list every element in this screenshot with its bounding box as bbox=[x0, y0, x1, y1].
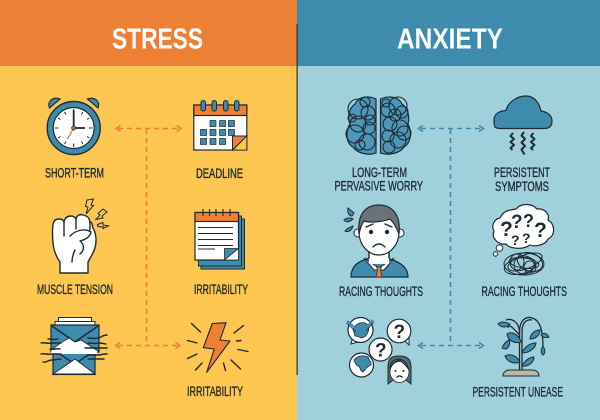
label: racing thoughts (boy): RACING THOUGHTS bbox=[339, 284, 423, 299]
label: muscle tension: MUSCLE TENSION bbox=[37, 282, 113, 297]
icon: thought cloud with question marks: ? bbox=[511, 232, 520, 248]
label: long-term pervasive worry: LONG-TERM bbox=[352, 165, 407, 180]
label: short-term: SHORT-TERM bbox=[45, 166, 104, 180]
icon: thought cloud with question marks: ? bbox=[534, 219, 547, 242]
icon: thought cloud with question marks: ? bbox=[511, 212, 523, 233]
header: stress bbox=[0, 0, 298, 66]
arrow: stress connector bbox=[116, 126, 181, 348]
icon: torn envelope bbox=[41, 318, 107, 374]
icon: thought cloud with question marks: ? bbox=[500, 218, 513, 241]
icon: notepad stack bbox=[195, 209, 244, 269]
bubble: question: ? bbox=[394, 322, 405, 343]
label: long-term pervasive worry: PERVASIVE WORRY bbox=[334, 178, 423, 194]
icon: thought cloud with question marks: ? bbox=[522, 230, 531, 246]
bubble: globe bbox=[350, 353, 374, 377]
label: irritability (bolt): IRRITABILITY bbox=[187, 384, 243, 399]
icon: tension bolts bbox=[86, 199, 108, 228]
icon: wilting plant bbox=[498, 318, 549, 376]
arrow: anxiety connector bbox=[418, 126, 484, 348]
icon: worried thought bubbles and girl bbox=[346, 318, 411, 384]
icon: rain cloud bbox=[494, 96, 552, 154]
label: deadline: DEADLINE bbox=[196, 166, 243, 181]
label: persistent symptoms bbox=[494, 165, 550, 194]
icon: lightning bolt bbox=[188, 323, 248, 372]
header: stress: STRESS bbox=[112, 24, 203, 56]
header: anxiety: ANXIETY bbox=[397, 24, 503, 56]
icon: girl bbox=[388, 356, 411, 384]
icon: alarm clock bbox=[47, 98, 100, 154]
label: long-term pervasive worry bbox=[334, 165, 423, 194]
icon: calendar bbox=[194, 100, 247, 150]
icon: tangled scribble bbox=[503, 249, 545, 277]
label: persistent symptoms: PERSISTENT bbox=[494, 165, 550, 180]
icon: tangled brain bbox=[346, 97, 411, 154]
bubble: question middle: ? bbox=[375, 340, 387, 362]
icon: thought cloud with question marks: ? bbox=[523, 211, 534, 231]
icon: worried boy bbox=[344, 205, 408, 277]
header: anxiety bbox=[297, 0, 600, 66]
icon: sweat drops bbox=[344, 208, 354, 232]
bubble: crossed blob bbox=[346, 318, 374, 344]
label: irritability (notepad): IRRITABILITY bbox=[194, 282, 248, 297]
icon: clenched fist bbox=[52, 199, 108, 273]
panel: anxiety background bbox=[297, 0, 600, 420]
label: persistent symptoms: SYMPTOMS bbox=[495, 179, 549, 194]
panel: stress background bbox=[0, 0, 298, 420]
icon: thought cloud with question marks bbox=[493, 204, 554, 277]
